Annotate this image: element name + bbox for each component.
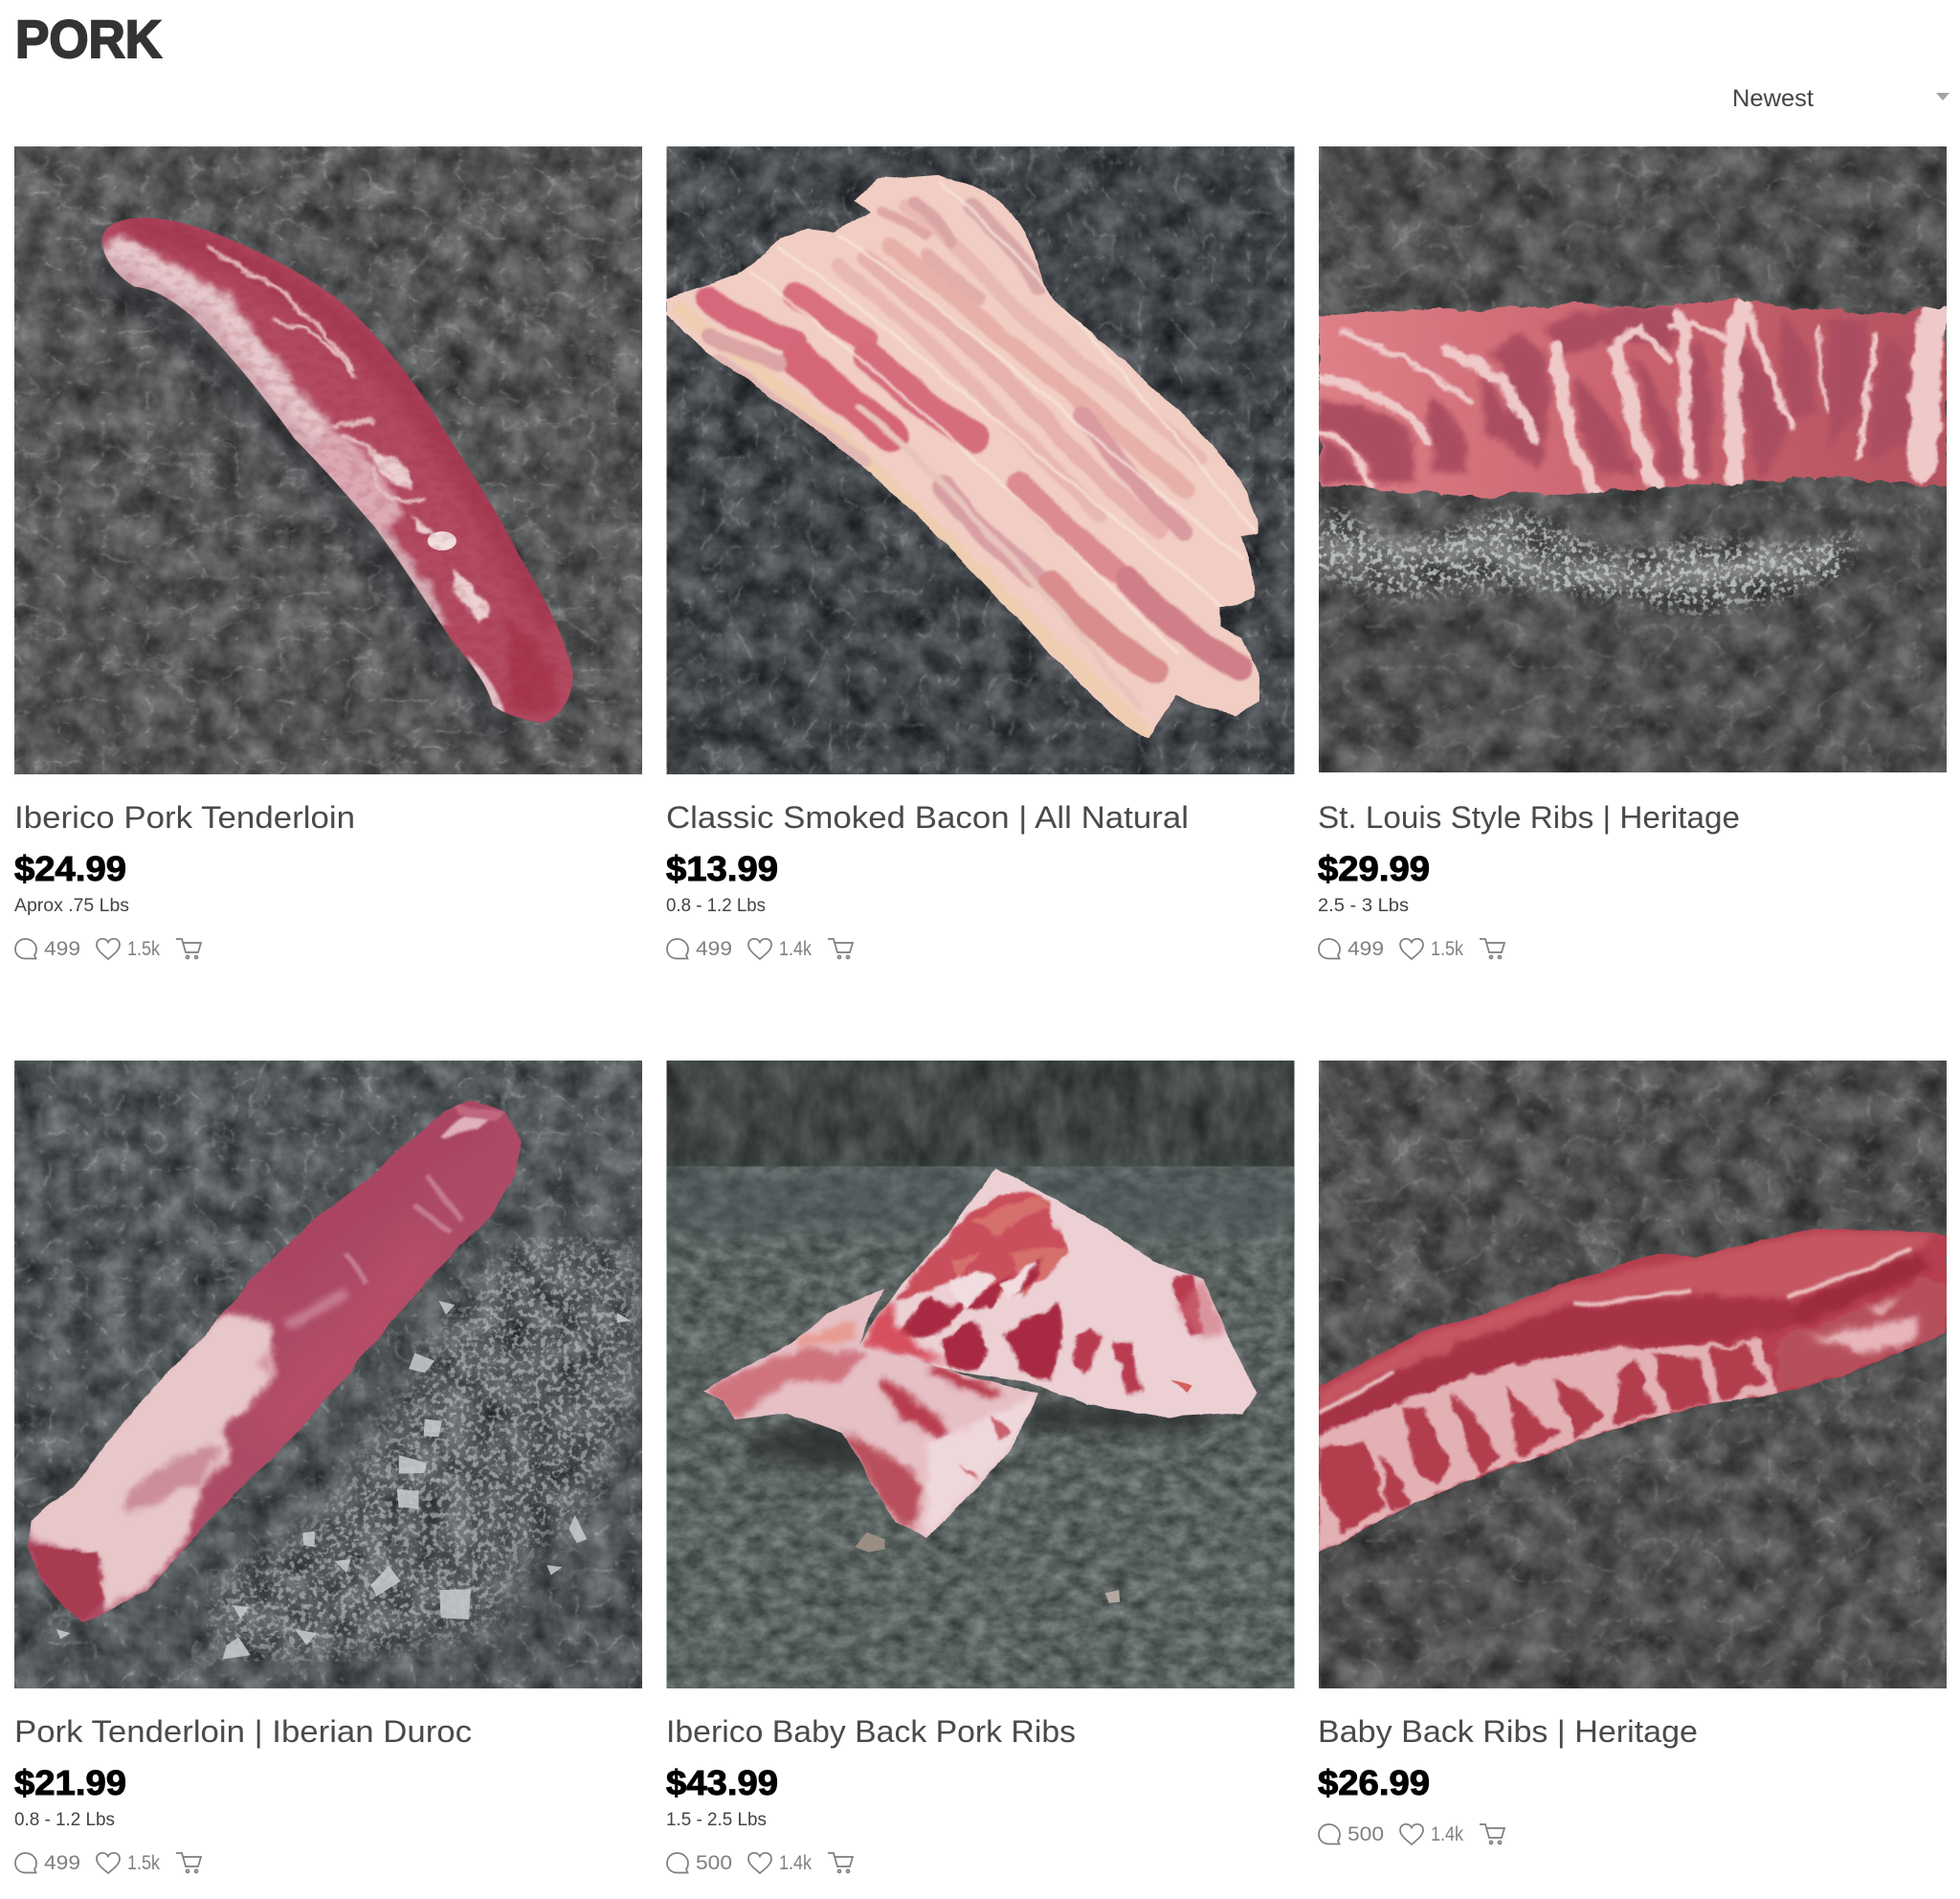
price: $24.99	[14, 849, 126, 888]
crumbs	[855, 1532, 885, 1553]
weight: 0.8 - 1.2 Lbs	[14, 1810, 115, 1830]
photo: stacked ribs on slate table	[666, 1061, 1295, 1688]
stats row: 499	[44, 1852, 80, 1874]
stats row	[1319, 938, 1504, 960]
product name: Pork Tenderloin | Iberian Duroc	[14, 1714, 472, 1749]
stats row: 500	[1348, 1823, 1384, 1845]
stats row: 499	[1348, 938, 1384, 960]
photo: ribs with salt on slate	[1319, 146, 1947, 772]
price: $43.99	[666, 1763, 778, 1802]
product card: Classic Smoked Bacon	[666, 146, 1294, 960]
salt flakes	[56, 1301, 631, 1659]
product card: Pork Tenderloin Iberian Duroc	[14, 1061, 642, 1874]
product name: Iberico Baby Back Pork Ribs	[666, 1714, 1076, 1749]
product card: Iberico Pork Tenderloin	[14, 146, 642, 960]
stats row: 1.5k	[1431, 938, 1463, 960]
stats row: 1.5k	[127, 1852, 160, 1874]
salt scatter	[207, 1237, 639, 1662]
price: $21.99	[14, 1763, 126, 1802]
stats row: 500	[696, 1852, 732, 1874]
product card: Baby Back Ribs Heritage	[1318, 1061, 1947, 1845]
page title: PORK	[15, 9, 162, 69]
product name: Iberico Pork Tenderloin	[14, 800, 355, 835]
stats row	[15, 938, 201, 960]
photo: thick tenderloin with sea salt	[14, 1061, 642, 1688]
stats row: 1.4k	[779, 938, 812, 960]
product name: Classic Smoked Bacon | All Natural	[666, 800, 1189, 835]
stats row: 499	[696, 938, 732, 960]
product card: St. Louis Style Ribs	[1318, 146, 1947, 960]
stats row	[667, 1852, 853, 1874]
lower rib piece	[666, 1061, 1294, 1688]
price: $29.99	[1318, 849, 1430, 888]
weight: 2.5 - 3 Lbs	[1318, 896, 1409, 916]
photo: rack of ribs on slate	[1319, 1061, 1947, 1688]
salt band	[1319, 507, 1863, 615]
stats row: 1.4k	[1431, 1823, 1463, 1845]
product card: Iberico Baby Back Pork Ribs	[666, 1061, 1294, 1874]
sort dropdown: Newest	[1732, 85, 1814, 112]
upper rib piece	[666, 1061, 1294, 1688]
sort dropdown	[1732, 85, 1949, 112]
weight: Aprox .75 Lbs	[14, 896, 129, 916]
weight: 0.8 - 1.2 Lbs	[666, 896, 766, 916]
stats row	[1319, 1823, 1504, 1845]
stats row: 1.4k	[779, 1852, 812, 1874]
product name: St. Louis Style Ribs | Heritage	[1318, 800, 1740, 835]
stats row	[667, 938, 853, 960]
price: $26.99	[1318, 1763, 1430, 1802]
weight: 1.5 - 2.5 Lbs	[666, 1810, 767, 1830]
stats row: 1.5k	[127, 938, 160, 960]
photo: tenderloin on slate	[14, 146, 642, 774]
stats row: 499	[44, 938, 80, 960]
stats row	[15, 1852, 201, 1874]
photo: bacon strips on slate	[666, 146, 1294, 774]
price: $13.99	[666, 849, 778, 888]
product name: Baby Back Ribs | Heritage	[1318, 1714, 1698, 1749]
